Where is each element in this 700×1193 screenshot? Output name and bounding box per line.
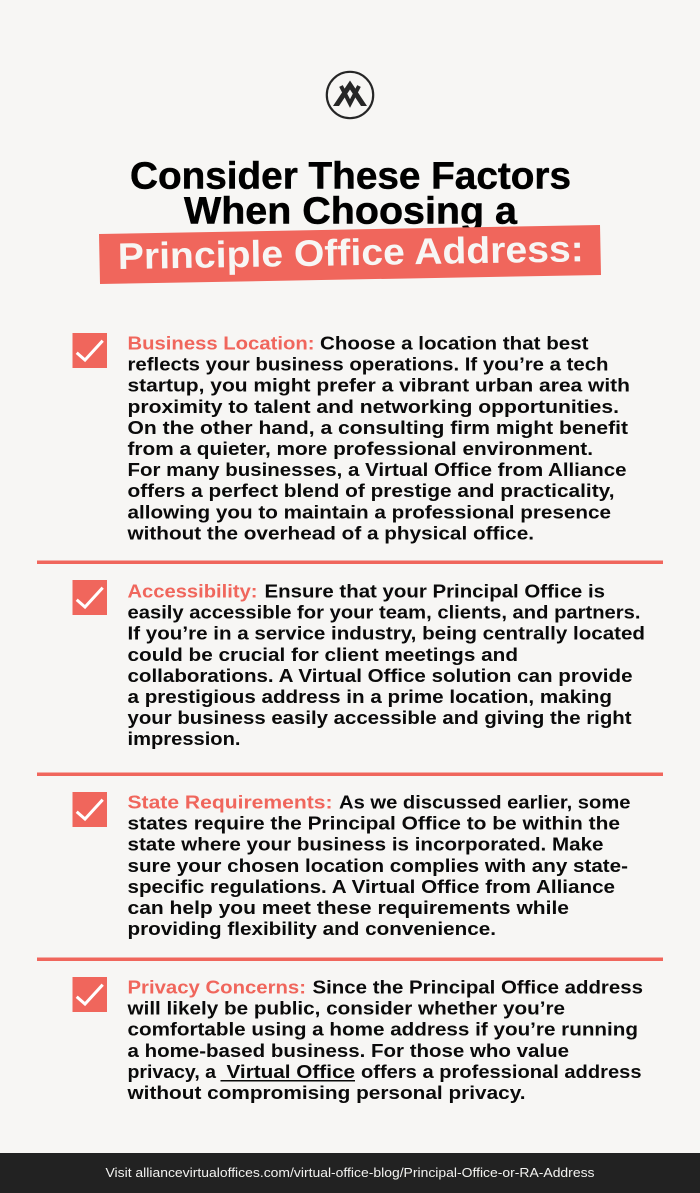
text block: State Requirements: can help you meet these requirements while	[128, 897, 569, 918]
text block: Privacy Concerns: Privacy Concerns:	[128, 976, 306, 998]
text block: Accessibility: could be crucial for client meetings and	[128, 644, 518, 665]
text block: State Requirements: sure your chosen location complies with any state-	[128, 855, 628, 876]
panel: Privacy Concerns	[72, 976, 643, 1103]
text block: Business Location: Business Location:	[128, 332, 314, 354]
text block: Accessibility: If you’re in a service industry, being centrally located	[128, 623, 645, 644]
title: Consider These Factors	[130, 156, 571, 198]
text block: State Requirements	[128, 792, 630, 939]
text block: State Requirements: As we discussed earlier, some	[339, 792, 630, 812]
icon: checkbox	[72, 792, 107, 827]
text block: Business Location: For many businesses, a Virtual Office from Alliance	[128, 459, 626, 480]
text block: Privacy Concerns: Virtual Office	[226, 1061, 355, 1082]
icon: checkbox	[72, 333, 107, 368]
text block: Privacy Concerns: comfortable using a home address if you’re running	[128, 1019, 638, 1040]
text block: Accessibility: Accessibility:	[128, 580, 258, 602]
text block: Business Location: without the overhead of a physical office.	[126, 522, 534, 543]
text block: Accessibility: impression.	[128, 728, 240, 749]
text block: Business Location: Choose a location that best	[320, 332, 588, 354]
text block: Privacy Concerns	[126, 976, 643, 1103]
text block: Accessibility: easily accessible for your team, clients, and partners.	[128, 602, 640, 623]
text block: Business Location: reflects your business operations. If you’re a tech	[128, 354, 608, 375]
title	[130, 156, 571, 232]
text block: Business Location: offers a perfect blend of prestige and practicality,	[128, 480, 614, 501]
text block: State Requirements: State Requirements:	[128, 792, 332, 812]
icon: checkbox	[72, 977, 107, 1012]
text block: Business Location: proximity to talent and networking opportunities.	[128, 396, 619, 417]
text block: Privacy Concerns: offers a professional address	[361, 1061, 642, 1082]
text block: Business Location	[126, 332, 630, 543]
footer bar	[0, 1153, 700, 1193]
text block: State Requirements: states require the Principal Office to be within the	[128, 813, 620, 834]
title: When Choosing a	[184, 190, 518, 232]
panel: State Requirements	[72, 792, 630, 939]
text block: State Requirements: state where your business is incorporated. Make	[128, 834, 604, 855]
text block: Business Location: from a quieter, more professional environment.	[128, 438, 593, 459]
text block: Privacy Concerns: a home-based business. For those who value	[128, 1040, 569, 1061]
text block: State Requirements: providing flexibility and convenience.	[128, 918, 496, 939]
panel: Business Location	[72, 332, 630, 543]
highlighted banner: Principle Office Address: Principle Office Address:	[117, 228, 584, 277]
text block: Privacy Concerns: will likely be public, consider whether you’re	[126, 998, 565, 1019]
text block: State Requirements: specific regulations. A Virtual Office from Alliance	[128, 876, 615, 897]
text block: Business Location: startup, you might prefer a vibrant urban area with	[128, 375, 630, 396]
footer bar: Visit alliancevirtualoffices.com/virtual-office-blog/Principal-Office-or-RA-Address	[106, 1166, 594, 1180]
text block: Accessibility	[128, 580, 645, 749]
icon: checkbox	[72, 580, 107, 615]
text block: Accessibility: Ensure that your Principal Office is	[264, 580, 605, 602]
text block: Accessibility: collaborations. A Virtual Office solution can provide	[128, 665, 632, 686]
text block: Business Location: On the other hand, a consulting firm might benefit	[128, 417, 628, 438]
icon: Alliance logo	[327, 72, 373, 118]
text block: Privacy Concerns: privacy, a	[128, 1061, 217, 1082]
panel: Accessibility	[72, 580, 645, 749]
text block: Privacy Concerns: without compromising personal privacy.	[126, 1082, 525, 1103]
text block: Accessibility: your business easily accessible and giving the right	[128, 707, 632, 728]
text block: Business Location: allowing you to maintain a professional presence	[128, 501, 611, 522]
text block: Accessibility: a prestigious address in a prime location, making	[128, 686, 612, 707]
text block: Privacy Concerns: Since the Principal Office address	[312, 976, 643, 998]
